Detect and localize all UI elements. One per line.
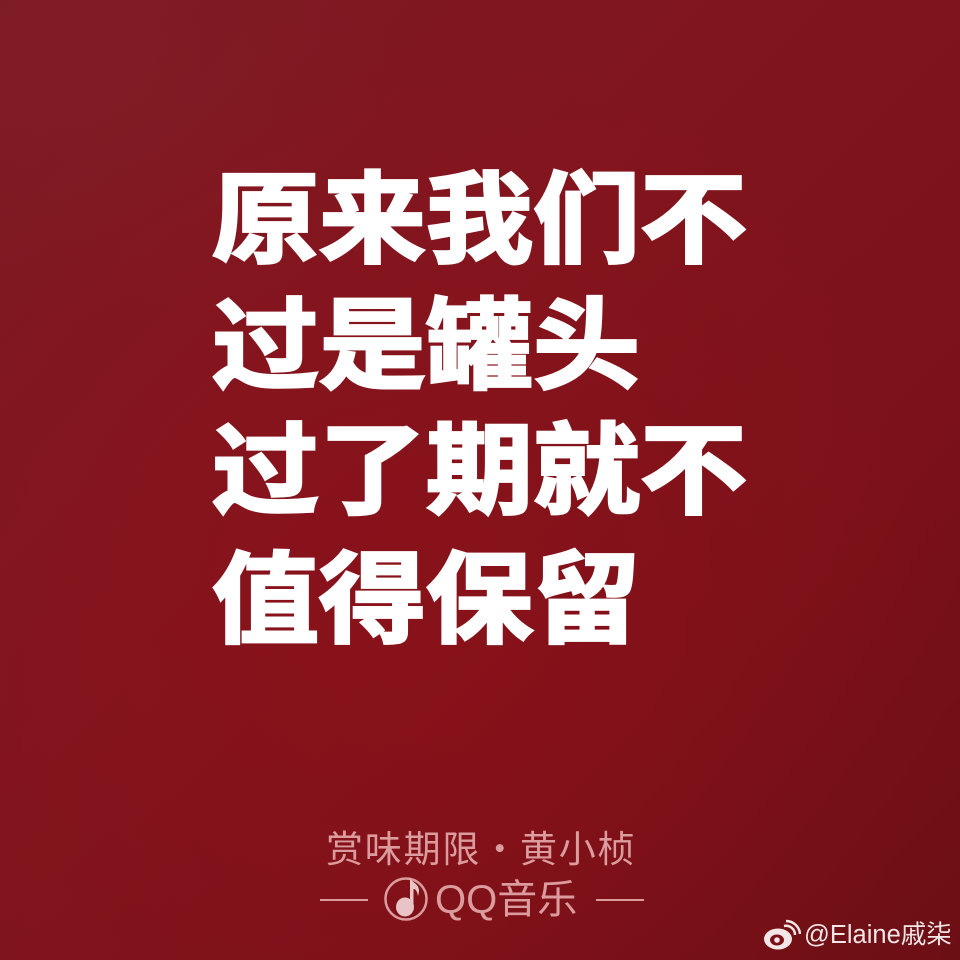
title line 2: 过是罐头 bbox=[212, 290, 640, 402]
brand name QQ music: QQ音乐 bbox=[435, 878, 577, 922]
left dash bbox=[320, 899, 368, 901]
song credit: 赏味期限・黄小桢 bbox=[326, 829, 636, 870]
icon: weibo logo bbox=[764, 920, 801, 950]
watermark handle: @Elaine戚柒 bbox=[804, 921, 952, 949]
title line 3: 过了期就不 bbox=[212, 415, 747, 527]
icon: QQ music logo bbox=[384, 877, 428, 921]
right dash bbox=[596, 899, 644, 901]
title line 4: 值得保留 bbox=[212, 544, 640, 656]
title line 1: 原来我们不 bbox=[212, 164, 747, 276]
